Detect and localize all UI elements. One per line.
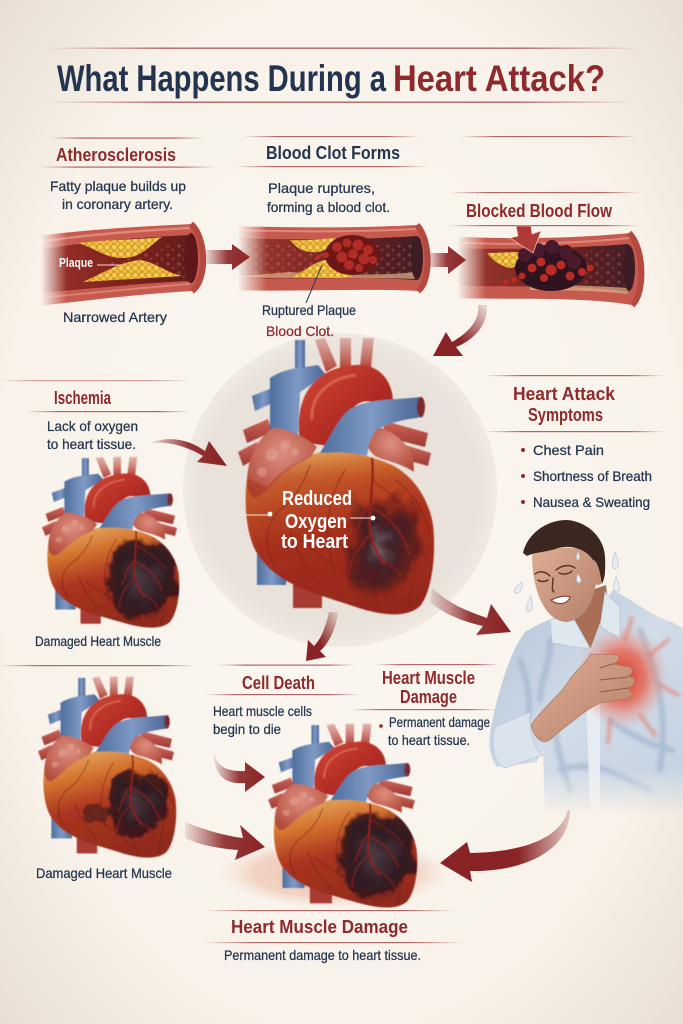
main heart illustration	[230, 338, 440, 620]
rolled sleeve	[493, 712, 543, 768]
arrow: blockage to heart	[433, 305, 487, 356]
forearm and hand	[531, 654, 635, 742]
label: Reduced Oxygen to Heart: to Heart	[281, 531, 348, 553]
text: ischemia description: to heart tissue.	[47, 436, 136, 452]
heading: Heart Attack Symptoms: Heart Attack	[513, 384, 616, 404]
text: blood clot description: Plaque ruptures,	[268, 180, 375, 196]
plaque fragment	[487, 252, 520, 268]
arrow: clot to blocked flow	[428, 246, 466, 274]
list: symptoms: Shortness of Breath	[533, 468, 652, 484]
bottom heart illustration	[268, 724, 419, 908]
neck	[574, 585, 607, 648]
label: Reduced Oxygen to Heart: Oxygen	[285, 511, 347, 533]
leader dots	[230, 512, 375, 520]
plaque deposits	[78, 237, 182, 282]
leader: ruptured plaque	[306, 265, 322, 303]
text: atherosclerosis description: Fatty plaque builds up	[50, 178, 186, 194]
artery: fully blocked	[448, 233, 642, 305]
ruptured plaque	[290, 238, 352, 278]
label: Damaged Heart Muscle lower: Damaged Heart Muscle	[36, 865, 172, 881]
text: cell death description	[213, 703, 312, 737]
artery: ruptured plaque with clot	[230, 225, 428, 291]
heading: Cell Death: Cell Death	[242, 673, 315, 693]
illustration: man clutching chest	[489, 520, 683, 815]
heading: Heart Muscle Damage bottom: Heart Muscle Damage	[231, 917, 408, 937]
heading: Heart Muscle Damage	[382, 668, 475, 707]
text: blood clot description	[267, 180, 390, 215]
heading: Atherosclerosis: Atherosclerosis	[56, 145, 176, 165]
text: permanent damage bottom: Permanent damage to heart tissue.	[224, 947, 421, 963]
heading: Blocked Blood Flow: Blocked Blood Flow	[466, 201, 613, 221]
facial features	[535, 566, 575, 592]
heading: Heart Muscle Damage: Heart Muscle	[382, 668, 475, 688]
text: ischemia description: Lack of oxygen	[47, 418, 138, 434]
chest pain glow	[576, 618, 678, 742]
text: cell death description: Heart muscle cells	[213, 703, 312, 719]
small heart: damaged muscle 1	[42, 457, 181, 628]
face	[532, 548, 597, 622]
text: atherosclerosis description: in coronary artery.	[62, 196, 173, 212]
heading: Heart Attack Symptoms	[513, 384, 616, 425]
arrow: cell death to heart	[214, 748, 265, 792]
label: Reduced Oxygen to Heart	[281, 488, 352, 553]
text: permanent damage bullet: to heart tissue.	[388, 732, 470, 748]
splotch under bottom heart	[219, 838, 451, 908]
blood clot	[316, 235, 379, 275]
label: Damaged Heart Muscle: Damaged Heart Muscle	[35, 633, 161, 649]
text: permanent damage bullet: Permanent damage	[389, 714, 490, 730]
label: Blood Clot: Blood Clot.	[266, 323, 334, 339]
heading: Ischemia: Ischemia	[54, 388, 112, 408]
arrow: damaged heart to bottom heart	[185, 822, 265, 860]
label: Narrowed Artery: Narrowed Artery	[63, 309, 167, 325]
heading: Heart Muscle Damage: Damage	[400, 687, 457, 707]
heading: Heart Attack Symptoms: Symptoms	[528, 405, 603, 425]
label: Plaque	[60, 258, 122, 270]
label: Reduced Oxygen to Heart: Reduced	[282, 488, 352, 510]
title: Heart Attack?	[393, 58, 605, 99]
circle backdrop	[183, 333, 497, 647]
arrow: heart to patient	[430, 588, 511, 635]
small heart: damaged muscle 2	[38, 677, 176, 858]
collar	[550, 592, 620, 648]
list: symptoms: Chest Pain	[533, 442, 604, 458]
label: Plaque: Plaque	[59, 256, 93, 270]
sweat drops	[514, 552, 620, 612]
list: symptoms	[521, 442, 652, 510]
text: atherosclerosis description	[50, 178, 186, 212]
heading: Blood Clot Forms: Blood Clot Forms	[266, 143, 400, 163]
arrow: heart to cell death	[306, 612, 338, 661]
text: blood clot description: forming a blood clot.	[267, 199, 390, 215]
text: ischemia description	[47, 418, 138, 452]
arrow: patient to bottom heart	[440, 810, 570, 882]
arrow: blockage pointer	[510, 226, 541, 253]
shirt	[489, 590, 683, 815]
list: symptoms: Nausea & Sweating	[533, 494, 650, 510]
ear	[596, 564, 605, 585]
occluding clot	[503, 240, 594, 291]
text: cell death description: begin to die	[213, 721, 281, 737]
button placket	[586, 704, 600, 802]
artery: narrowed by plaque	[38, 224, 203, 306]
title: What Happens During a	[57, 58, 386, 99]
text: permanent damage bullet	[379, 714, 490, 748]
hair	[523, 520, 605, 584]
label: Ruptured Plaque: Ruptured Plaque	[262, 302, 356, 318]
arrow: ischemia to heart	[150, 439, 227, 466]
arrow: atherosclerosis to clot	[205, 244, 250, 270]
